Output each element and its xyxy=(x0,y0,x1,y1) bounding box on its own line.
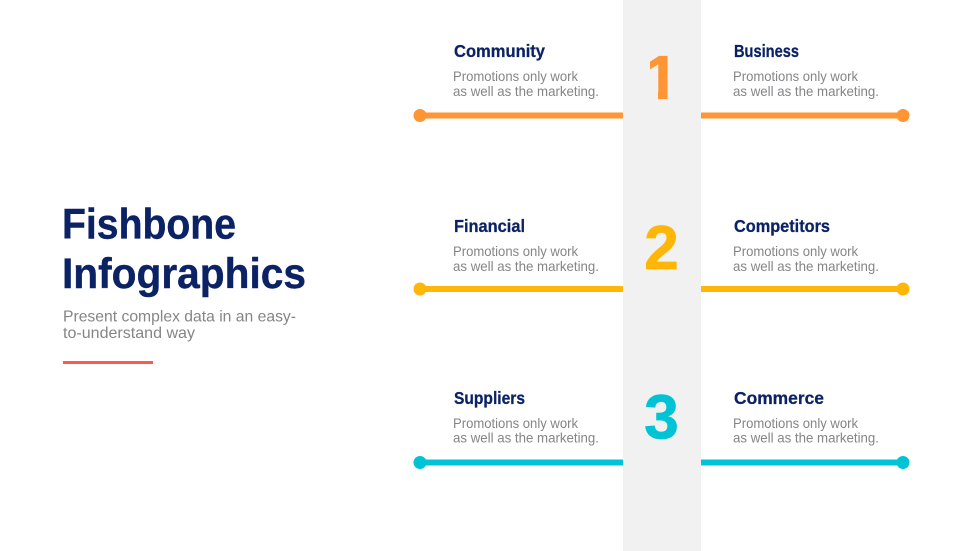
bone: Suppliers: as well as the marketing. xyxy=(453,430,599,446)
number 3: 3 xyxy=(644,384,679,452)
bone: Financial: Promotions only work xyxy=(453,243,579,259)
bone: Business: Promotions only work xyxy=(733,68,859,84)
title: Infographics xyxy=(62,250,306,298)
bone: Business: Business xyxy=(734,41,799,61)
subtitle: to-understand way xyxy=(63,325,195,342)
bone: Competitors xyxy=(701,216,910,296)
title: Fishbone xyxy=(62,200,236,248)
subtitle: Present complex data in an easy- xyxy=(63,308,296,326)
bone: Competitors: Promotions only work xyxy=(733,243,859,259)
bone: Competitors: Competitors xyxy=(734,216,830,236)
title xyxy=(62,200,306,298)
accent underline xyxy=(63,361,153,364)
bone: Suppliers: Promotions only work xyxy=(453,415,579,431)
number 1: 1 xyxy=(644,44,679,113)
bone: Suppliers: Suppliers xyxy=(454,388,525,408)
bone: Commerce: Commerce xyxy=(734,388,824,408)
bone: Suppliers xyxy=(414,388,623,469)
bone: Community: Promotions only work xyxy=(453,68,579,84)
bone: Commerce xyxy=(701,388,910,469)
bone: Competitors: as well as the marketing. xyxy=(733,258,879,274)
bone: Financial xyxy=(414,216,623,296)
panel: central spine xyxy=(623,0,701,551)
bone: Commerce: as well as the marketing. xyxy=(733,430,879,446)
number 2: 2 xyxy=(644,214,679,283)
bone: Community: as well as the marketing. xyxy=(453,83,599,99)
bone: Business: as well as the marketing. xyxy=(733,83,879,99)
bone: Community: Community xyxy=(454,41,545,61)
bone: Commerce: Promotions only work xyxy=(733,415,859,431)
bone: Financial: as well as the marketing. xyxy=(453,258,599,274)
subtitle xyxy=(63,308,296,342)
bone: Community xyxy=(414,41,623,122)
bone: Business xyxy=(701,41,910,122)
bone: Financial: Financial xyxy=(454,216,525,236)
